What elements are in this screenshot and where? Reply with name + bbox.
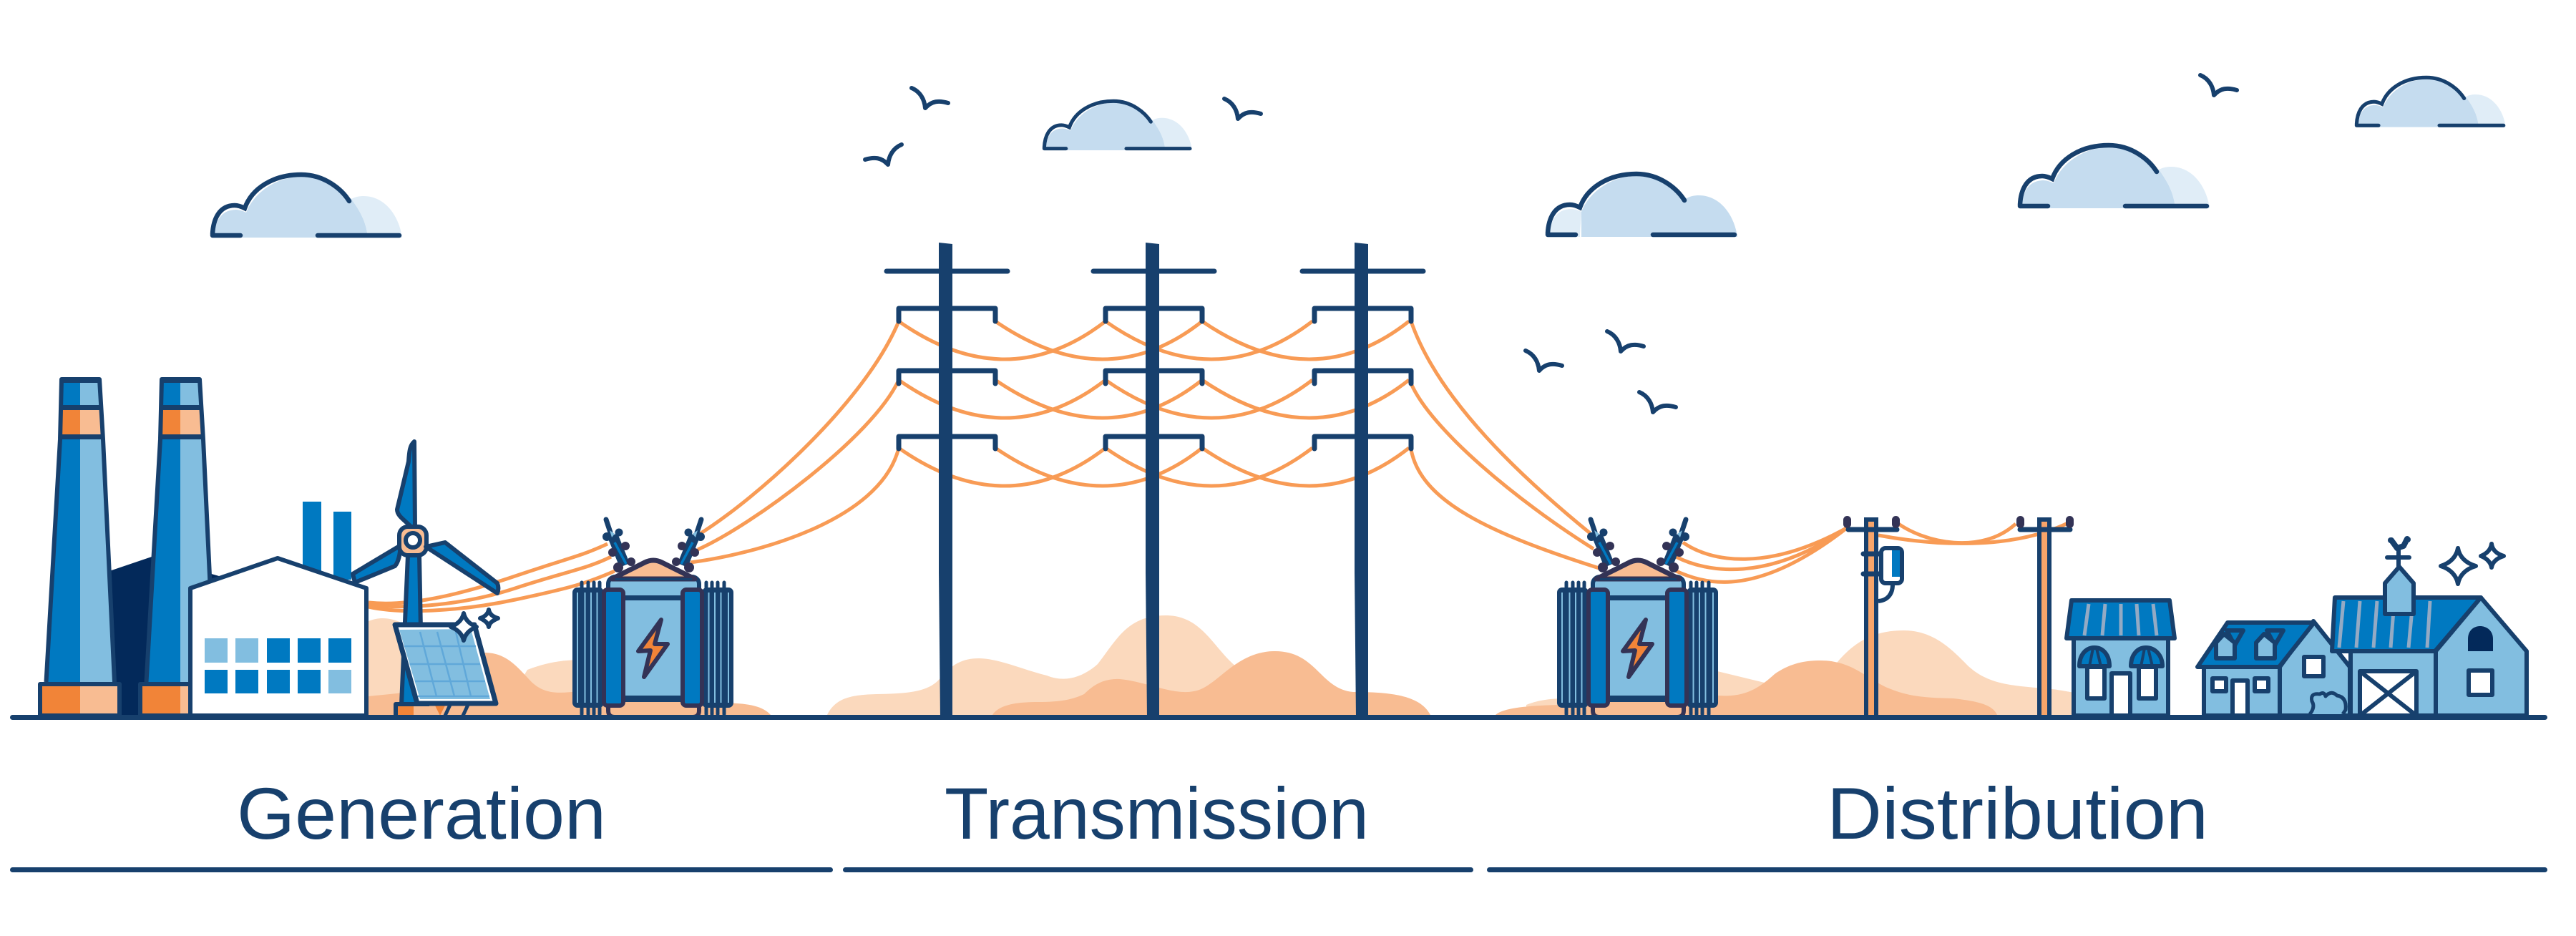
- barn gable: [2436, 598, 2527, 716]
- birds: [865, 75, 2237, 412]
- rear stacks: [303, 502, 351, 580]
- barn window: [2469, 671, 2492, 695]
- cloud: distribution right: [2356, 77, 2506, 127]
- barn: [2332, 537, 2527, 716]
- utility pole B: [2016, 516, 2074, 718]
- dark rear building: [109, 557, 219, 715]
- cloud: distribution middle: [2020, 145, 2210, 208]
- cloud: distribution left: [1548, 174, 1737, 237]
- distribution hills: [1496, 630, 2075, 715]
- panel face: [395, 625, 496, 703]
- rule: generation: [10, 867, 833, 872]
- panel grid: [404, 632, 489, 696]
- house two: [2197, 621, 2350, 716]
- transformer: generation: [572, 520, 733, 717]
- power lines: [369, 321, 2069, 611]
- sparkles: barn: [2441, 544, 2504, 584]
- transformer: distribution: [1557, 520, 1718, 717]
- factory building: [190, 558, 366, 716]
- transmission hills: [827, 615, 1430, 715]
- solar panel: [395, 625, 496, 716]
- barn door: [2360, 671, 2416, 716]
- blade top: [397, 442, 415, 528]
- chimney left: [40, 378, 119, 716]
- ground line: [10, 715, 2547, 720]
- windows and door: [2079, 648, 2162, 716]
- power plant: [40, 378, 366, 716]
- bush: [2310, 693, 2346, 714]
- generation hills: [369, 618, 771, 715]
- factory windows: [205, 638, 351, 693]
- barn loft: [2468, 626, 2493, 651]
- windows and door: [2212, 657, 2323, 716]
- transmission pylons: [887, 243, 1423, 718]
- dormers: [2216, 630, 2283, 658]
- mansard roof: [2197, 623, 2314, 667]
- heading: Transmission: Transmission: [945, 773, 1369, 854]
- weather vane: [2387, 537, 2411, 567]
- hub: [406, 533, 420, 547]
- cloud: generation: [213, 175, 402, 238]
- cupola: [2385, 567, 2414, 614]
- chimney right: [140, 378, 220, 716]
- barn roof: [2332, 598, 2481, 651]
- panel base: [396, 704, 468, 716]
- heading: Generation: Generation: [237, 773, 606, 854]
- blade left: [353, 545, 401, 582]
- turbine tower: [401, 555, 422, 705]
- pole box: [1863, 548, 1902, 601]
- cloud: transmission: [1044, 101, 1192, 150]
- blade right: [426, 542, 498, 593]
- nacelle: [399, 527, 426, 555]
- rule: transmission: [843, 867, 1473, 872]
- sparkles: solar: [451, 610, 498, 640]
- house one: [2067, 600, 2175, 716]
- house one roof: [2067, 600, 2175, 638]
- wind turbine: [353, 442, 498, 705]
- heading: Distribution: Distribution: [1827, 773, 2208, 854]
- rule: distribution: [1487, 867, 2547, 872]
- utility pole A: [1843, 516, 1902, 718]
